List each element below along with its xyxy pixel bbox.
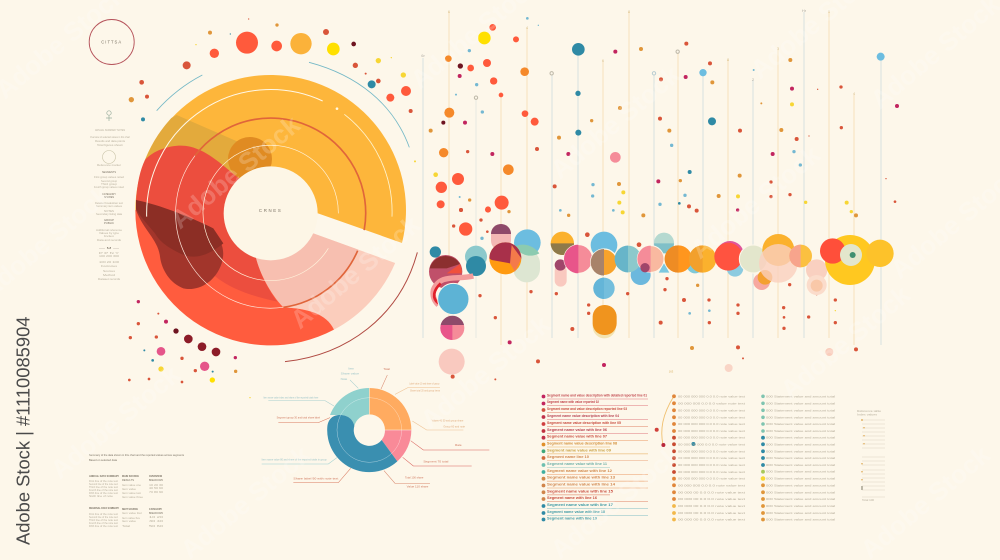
left legend column: SEGMENTS — [102, 170, 116, 174]
notes column two: Item value — [122, 520, 137, 523]
white outer ring arcs — [147, 90, 392, 308]
table column one — [542, 394, 648, 521]
right bubbles — [739, 234, 894, 295]
axis top labels: 3 — [777, 46, 780, 51]
axis top labels — [421, 8, 856, 96]
table column one: Segment name value description with line 05 — [547, 421, 621, 425]
callout labels: Values 40 50 and group share — [432, 419, 464, 423]
axis top labels: Hr — [802, 8, 807, 13]
left legend column: Footnotes — [101, 265, 118, 268]
middle bubbles — [564, 241, 744, 338]
notes column two: Item value — [122, 488, 137, 491]
faint watermarks: Adobe Stock — [45, 359, 186, 485]
lower scatter dots: 163 — [669, 370, 674, 374]
pink inner band — [256, 234, 358, 307]
table column two: 00 000 000 000 0.0 0.0 note value text — [678, 463, 745, 467]
notes column one: ANNUAL DATA SUMMARY — [89, 474, 119, 478]
dots around main chart — [128, 18, 416, 398]
faint watermarks: Adobe Stock — [775, 279, 916, 405]
left legend column: NOTES — [104, 210, 114, 213]
vertical lollipop lines — [421, 8, 881, 345]
notes column three: 50 60 — [149, 525, 165, 528]
left legend column: P P N Y — [99, 251, 120, 255]
table column one: Segment name line 10 — [547, 455, 589, 459]
axis top labels: 0 — [828, 9, 831, 14]
notes column three: CATEGORY — [149, 507, 162, 511]
table column one: Segment name value with line 17 — [547, 503, 613, 507]
left legend column: Total figures shown — [97, 143, 124, 147]
left legend column: Overview of selected values in this chart — [90, 135, 130, 139]
table column two: 00 000 000 000 0.0 0.0 note value text — [678, 449, 745, 453]
table column one: Segment name value description with line 04 — [547, 414, 619, 418]
table column one: Segment name value with line 13 — [547, 476, 615, 480]
left legend column: 100 20 100 — [99, 260, 119, 264]
table column one: Segment name with line 19 — [547, 516, 597, 520]
notes column one: Second line of the note text — [89, 516, 118, 519]
callout labels: Share label 90 with note text — [293, 476, 339, 480]
donut callouts — [262, 375, 489, 483]
axis top labels: 2 — [752, 77, 755, 82]
table column two: 00 000 000 000 0.0 0.0 note value text — [678, 436, 745, 440]
connector curve and markers — [655, 396, 695, 447]
table column two: 00 000 00 0.0 0.0 note value text — [678, 518, 745, 522]
notes column two: Item value four — [122, 512, 142, 515]
table column two: 00 000 00 0.0 0.0 note value text — [678, 511, 745, 515]
notes column three: BREAKDOWN — [149, 478, 163, 482]
axis top labels: 4 — [526, 25, 529, 30]
left legend column: Additional reference — [96, 229, 123, 232]
back bubbles — [429, 224, 674, 305]
table column three: 000 Statement value and amount total — [766, 415, 835, 419]
table column one: Segment name value with line 07 — [547, 435, 607, 439]
faint watermarks: Adobe Stock — [165, 109, 306, 235]
callout labels: Label value 10 and share of group — [409, 382, 440, 386]
outer teal and red arcs — [157, 62, 417, 362]
left legend column: Values by type — [99, 232, 120, 235]
left legend column: 100 200 300 — [99, 255, 120, 258]
left legend column: First group values noted — [94, 176, 125, 179]
table column two: 00 000 000 000 0.0 0.0 note value text — [678, 408, 745, 412]
badge: top-left circle — [89, 20, 134, 64]
yellow segment — [135, 75, 406, 243]
table column three: 000 Statement value and amount total — [766, 463, 835, 467]
table column one: Segment name value description line 08 — [547, 442, 617, 446]
table column three: 000 Statement value and amount total — [766, 504, 835, 508]
notes column one: Sixth line of note — [89, 495, 114, 498]
table column three: 000 Statement value and amount total — [766, 408, 835, 412]
notes column three: OVERVIEW — [149, 474, 162, 478]
faint watermarks: Adobe Stock — [545, 59, 686, 185]
table column two: 00 000 000 000 0.0 0.0 note value text — [678, 429, 745, 433]
notes column one — [89, 474, 119, 528]
left legend column: Method — [103, 274, 116, 277]
coral segment — [135, 210, 334, 345]
table column three: 000 Statement value and amount total — [766, 456, 835, 460]
left stacked bubbles — [438, 259, 567, 375]
notes column two: MAIN SOURCE — [122, 474, 139, 478]
badge: top-left circle: CITTSA — [101, 40, 122, 44]
notes column three: 70 80 90 — [149, 491, 164, 494]
notes column one: REGIONAL DATA SUMMARY — [89, 506, 119, 510]
table column one: Segment name value with line 15 — [547, 489, 613, 493]
left legend column: Data and records — [97, 239, 122, 242]
faint watermarks: Adobe Stock — [415, 309, 556, 435]
table column two: 00 000 000 0.0 0.0 value note text — [678, 401, 745, 405]
table column two: 00 000 000 000 0.0 0.0 note value text — [678, 394, 745, 398]
left legend column: Detailed breakdown text — [95, 202, 123, 205]
notes column three: 30 40 — [149, 520, 165, 523]
notes column one: Fourth line of the note text — [89, 522, 118, 525]
notes column two: Item value two — [122, 492, 142, 495]
left legend column: Fourth group values noted — [94, 186, 125, 189]
callout labels — [262, 366, 465, 488]
table column three: 000 Statement value and amount total — [766, 401, 835, 405]
small right list: Index values — [857, 412, 878, 416]
table column two: 00 000 000 000 0.0 0.0 note value text — [678, 470, 745, 474]
table column two: 00 000 00 0.0 0.0 note value text — [678, 504, 745, 508]
callout labels: Item name value 80 and share of the reported totals in group — [262, 458, 327, 462]
table column one: Segment name with line 16 — [547, 496, 597, 500]
callout labels: Value 110 share — [407, 484, 429, 488]
axis top labels: 8 — [628, 9, 631, 14]
table column two: 00 000 000 0.0 0.0 note value text — [678, 483, 745, 487]
table column three: 000 Statement value and amount total — [766, 429, 835, 433]
table column three: 000 Statement value and amount total — [766, 490, 835, 494]
scatter dots — [429, 17, 899, 212]
main radial chart — [135, 62, 417, 362]
table column two: 00 000 00 000 0.0 0.0 note value text — [678, 442, 745, 446]
notes column two: Item value one — [122, 484, 142, 487]
center hole — [224, 166, 318, 260]
table column three: 000 Statement value and amount total — [766, 449, 835, 453]
notes column one: First line of the note text — [89, 513, 118, 516]
left legend column: SHARES — [104, 196, 114, 199]
callout labels: Total — [383, 367, 390, 371]
notes column two: Total — [122, 525, 131, 528]
callout labels: Segment group 30 and total share label — [277, 415, 320, 419]
red inner region — [136, 146, 277, 302]
callout labels: Item name value index and share of the reported totals here — [263, 396, 319, 400]
left legend column: Second group — [101, 180, 118, 183]
notes column three — [149, 474, 165, 528]
icon: ornament — [106, 111, 112, 121]
callout labels: Item — [348, 366, 355, 370]
callout labels: Group 60 and note — [443, 424, 465, 428]
table column three: 000 Statement value and amount total — [766, 394, 835, 398]
table column three: 000 Statement value and amount total — [766, 470, 835, 474]
axis top labels: 6 — [448, 9, 451, 14]
callout labels: Rate — [455, 443, 462, 447]
axis top labels: 8 — [727, 57, 730, 62]
dark blob — [136, 200, 223, 289]
lower scatter dots — [451, 207, 858, 380]
faint watermarks: Adobe Stock — [285, 209, 426, 335]
pink segment — [256, 233, 395, 330]
notes column two: NEXT SOURCE — [122, 507, 138, 511]
callout labels: Share total 20 and group items — [410, 388, 440, 392]
table column two: 00 000 000 000 0.0 0.0 note value text — [678, 477, 745, 481]
ochre circle — [228, 137, 272, 181]
small donut chart — [262, 366, 489, 488]
axis top labels: 6 — [602, 58, 605, 63]
small right list: Total 100 — [862, 499, 875, 502]
table column three: 000 Statement value and amount total — [766, 476, 835, 480]
notes column three: BREAKDOWN — [149, 511, 163, 515]
notes column one: First line of the note text — [89, 480, 118, 483]
left legend column: Results and data points — [95, 139, 126, 143]
darker blob band — [136, 200, 223, 257]
table column one: Segment name value with line 06 — [547, 428, 607, 432]
left legend column: GROUP — [104, 218, 114, 222]
table column two: 00 000 00 0.0 0.0 note value text — [678, 497, 745, 501]
callout labels: Note — [341, 377, 348, 381]
table column three: 000 Statement value and amount total — [766, 436, 835, 440]
table column two — [672, 394, 745, 522]
table column three: 000 Statement value and amount total — [766, 511, 835, 515]
notes column three: 10 20 — [149, 516, 165, 519]
left legend column: ANNUAL SUMMARY NOTES — [95, 128, 125, 132]
left legend column: CATEGORY — [102, 192, 116, 196]
notes column three: 10 20 30 — [149, 484, 164, 487]
callout labels: Share value — [341, 372, 359, 376]
table column two: 00 000 000 000 0.0 0.0 note value text — [678, 422, 745, 426]
left legend column: Summary item values — [96, 205, 123, 208]
table column one: Segment name and value description with detailed reported line 01 — [547, 394, 647, 398]
table column three — [761, 394, 835, 522]
left legend column: PUBLIC — [104, 222, 114, 225]
left legend column: Reference marker — [97, 164, 121, 167]
left legend column — [90, 111, 130, 281]
table column one: Segment name value with line 11 — [547, 462, 607, 466]
stock id label: Adobe Stock | #1110085904 — [12, 317, 34, 545]
left legend column: Secondary listing data — [96, 213, 123, 216]
left legend column: Index — [104, 235, 115, 238]
center label: CRNES — [259, 208, 282, 213]
bottom-left notes block — [89, 453, 185, 528]
bottom-left notes block: Based on selected data — [89, 458, 118, 462]
notes column two: Item value three — [122, 496, 144, 499]
left legend column: Sources — [103, 270, 116, 273]
small right list — [857, 409, 885, 502]
callout labels: Segment 70 total — [423, 460, 449, 464]
notes column one: Fifth line of the note text — [89, 525, 118, 528]
axis top labels: 4 — [853, 91, 856, 96]
table column three: 000 Statement value and amount total — [766, 422, 835, 426]
faint watermarks: Adobe Stock — [685, 139, 826, 265]
notes column one: Fifth line of the note text — [89, 492, 118, 495]
notes column one: Third line of the note text — [89, 519, 118, 522]
notes column one: Second line of the note text — [89, 483, 118, 486]
table column one: Segment name and value description reported line 03 — [547, 407, 627, 411]
table column one: Segment name with value reported 02 — [547, 400, 599, 404]
small right list: Reference table — [857, 409, 882, 413]
table column two: 00 000 000 000 0.0 0.0 note value text — [678, 415, 745, 419]
left legend column: — M — — [99, 246, 119, 250]
table column one: Segment name value with line 09 — [547, 448, 611, 452]
bubble row — [429, 224, 894, 375]
table column three: 000 Statement value and amount total — [766, 518, 835, 522]
table column two: 00 000 00 0.0 0.0 note value text — [678, 490, 745, 494]
left legend column: Third group — [101, 183, 118, 186]
notes column two: Item value five — [122, 517, 141, 520]
table column three: 000 Statement value and amount total — [766, 497, 835, 501]
bottom-left notes block: Summary of the data shown in this chart and the reported values across segments — [89, 453, 185, 457]
table column one: Segment name value with line 14 — [547, 482, 615, 486]
left legend column: Dataset records — [98, 278, 121, 281]
table column one: Segment name value with line 18 — [547, 510, 605, 514]
callout labels: Total 100 share — [405, 476, 424, 480]
table column one: Segment name value with line 12 — [547, 469, 612, 473]
ochre band — [143, 115, 240, 180]
donut segments — [327, 388, 411, 472]
notes column one: Third line of the note text — [89, 486, 118, 489]
notes column one: Fourth line of the note text — [89, 489, 118, 492]
table column two: 00 000 000 000 0.0 0.0 note value text — [678, 456, 745, 460]
table column three: 000 Statement value and amount total — [766, 442, 835, 446]
notes column three: 40 50 60 — [149, 487, 164, 490]
axis top labels: 6r — [421, 53, 425, 58]
notes column two — [122, 474, 144, 528]
table column three: 000 Statement value and amount total — [766, 483, 835, 487]
notes column two: RESULTS — [122, 478, 134, 482]
